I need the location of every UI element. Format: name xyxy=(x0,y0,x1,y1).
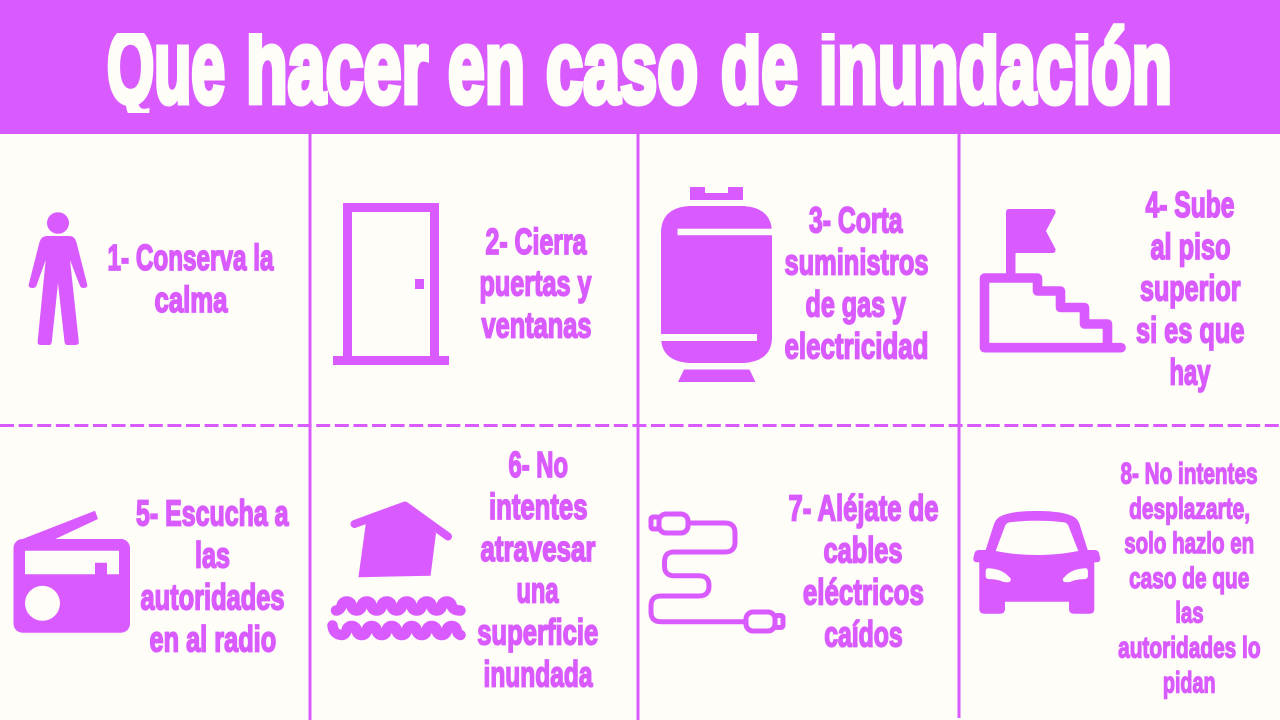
panel 5: escucha a las autoridades xyxy=(14,492,289,660)
icon: flooded house xyxy=(332,506,460,635)
text: step 5: autoridades xyxy=(140,576,284,618)
text: step 6: superficie xyxy=(477,612,598,652)
text: step 3 xyxy=(784,200,928,366)
text: step 4: al piso xyxy=(1150,226,1230,267)
text: step 7 xyxy=(788,488,938,654)
title banner xyxy=(0,0,1280,134)
panel 8: no intentes desplazarte xyxy=(973,458,1261,699)
text: step 5: 5- Escucha a xyxy=(136,492,289,534)
text: step 3: electricidad xyxy=(784,326,928,366)
text: step 6: 6- No xyxy=(508,444,568,485)
text: step 6: atravesar xyxy=(480,528,596,569)
text: step 1: calma xyxy=(154,279,228,320)
panel 1: conserva la calma xyxy=(29,212,274,345)
text: step 5 xyxy=(136,492,289,660)
text: step 4: hay xyxy=(1170,352,1210,392)
text: step 7: cables xyxy=(824,530,902,570)
icon: radio xyxy=(14,511,130,633)
text: step 7: eléctricos xyxy=(803,572,924,612)
icon: stairs with flag xyxy=(984,209,1121,348)
text: step 5: en al radio xyxy=(150,618,276,660)
text: step 7: 7- Aléjate de xyxy=(788,488,938,528)
title: caso xyxy=(546,10,698,126)
text: step 6: una xyxy=(516,570,559,610)
text: step 8: las xyxy=(1175,597,1204,630)
text: step 8: pidan xyxy=(1163,666,1216,699)
text: step 8 xyxy=(1118,458,1261,699)
panel 4: sube al piso superior xyxy=(984,184,1244,392)
text: step 6: intentes xyxy=(489,486,588,527)
text: step 6: inundada xyxy=(484,654,593,694)
text: step 3: de gas y xyxy=(806,284,906,324)
title xyxy=(108,23,1170,113)
text: step 6 xyxy=(477,444,598,694)
text: step 1: 1- Conserva la xyxy=(108,237,274,278)
text: step 4 xyxy=(1136,184,1244,392)
text: step 2 xyxy=(480,221,592,346)
title: de xyxy=(721,10,798,126)
panel 6: no atravesar superficie inundada xyxy=(332,444,598,694)
text: step 3: suministros xyxy=(784,242,928,282)
text: step 2: 2- Cierra xyxy=(486,221,587,262)
icon: gas cylinder xyxy=(660,187,772,382)
text: step 1 xyxy=(108,237,274,320)
title: en xyxy=(448,10,525,126)
text: step 4: superior xyxy=(1140,268,1240,308)
icon: car xyxy=(973,511,1100,614)
text: step 7: caídos xyxy=(824,614,903,654)
panel 2: cierra puertas y ventanas xyxy=(333,203,592,365)
icon: person xyxy=(29,212,87,345)
text: step 3: 3- Corta xyxy=(809,200,903,240)
text: step 2: ventanas xyxy=(482,304,592,346)
icon: cable xyxy=(651,514,783,631)
text: step 4: 4- Sube xyxy=(1146,184,1234,225)
text: step 5: las xyxy=(195,534,230,576)
panel 7: alejate de cables xyxy=(651,488,938,654)
title: hacer xyxy=(246,10,428,126)
title: Que xyxy=(107,10,225,126)
panel 3: corta suministros xyxy=(660,187,928,382)
text: step 2: puertas y xyxy=(480,262,592,304)
icon: door xyxy=(333,203,449,365)
